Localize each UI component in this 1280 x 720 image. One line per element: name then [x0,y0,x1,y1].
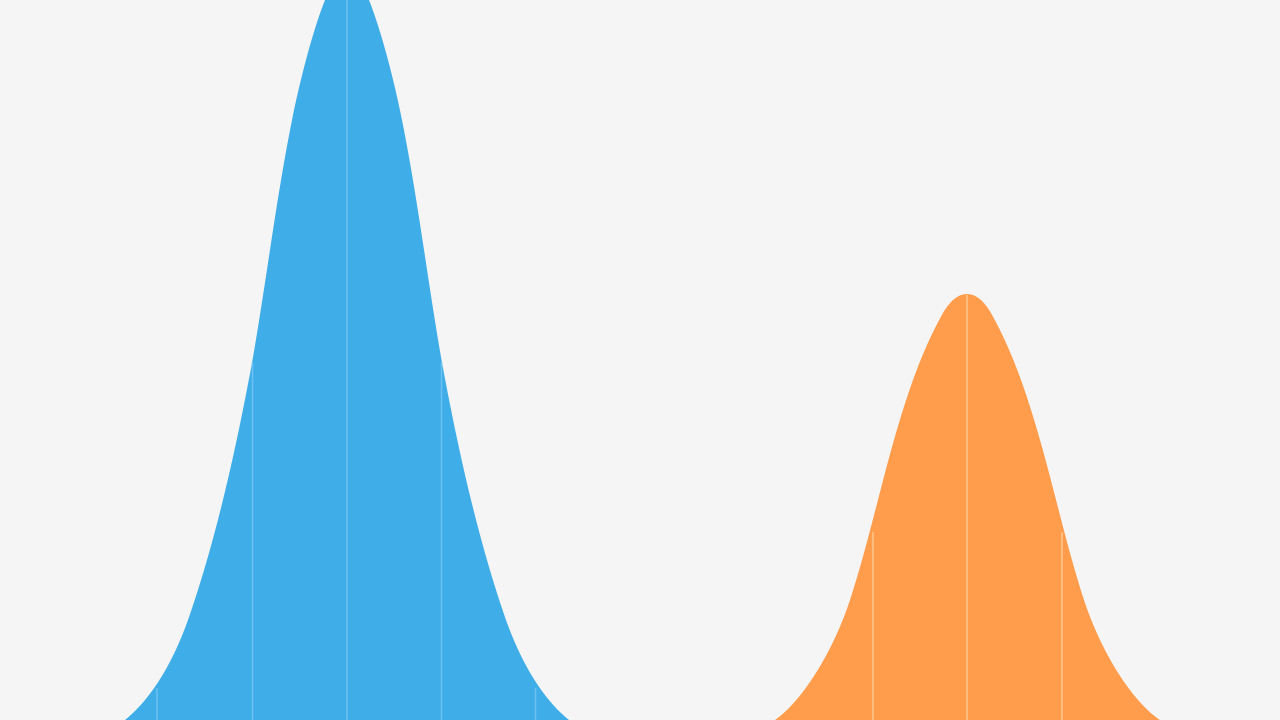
orange bell curve [775,294,1160,720]
blue bell curve [125,0,569,720]
